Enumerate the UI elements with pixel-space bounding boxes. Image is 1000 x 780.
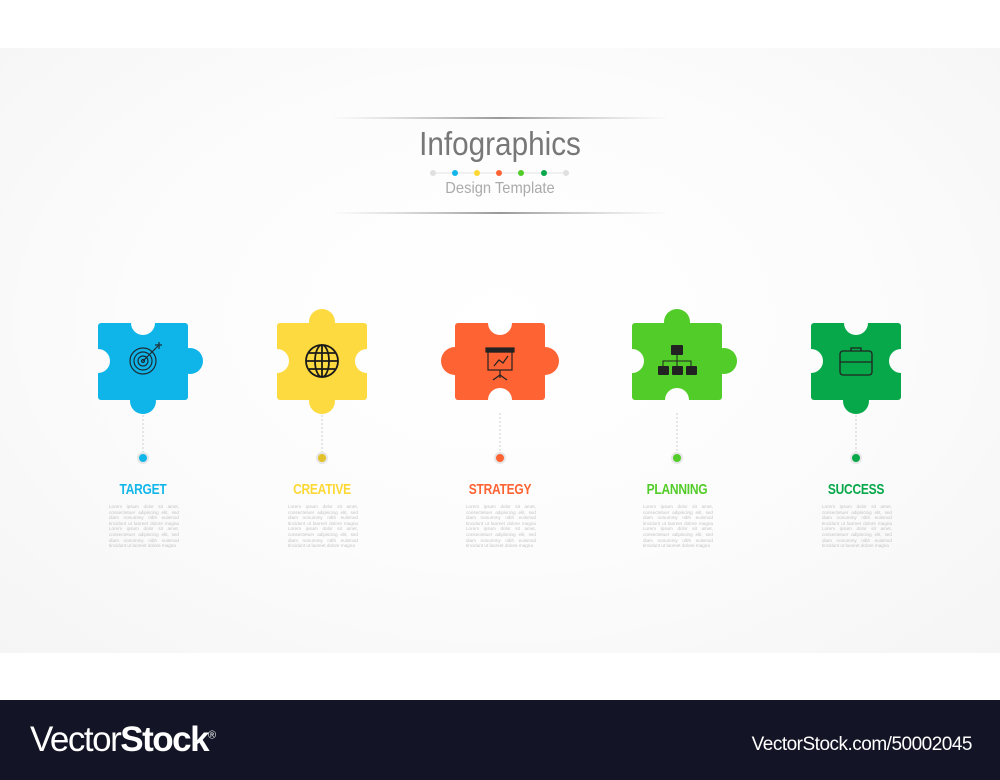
text block: success: Lorem ipsum dolor sit amet, consectetuer adipiscing elit, sed diam nonummy nibh euismod tincidunt ut laoreet dolore magna Lorem ipsum dolor sit amet, consectetuer adipiscing elit, sed diam nonummy nibh euismod tincidunt ut laoreet dolore magna (822, 504, 892, 548)
label: strategy: STRATEGY (469, 481, 531, 498)
label: creative: CREATIVE (293, 481, 351, 498)
footer url: VectorStock.com/50002045 (752, 734, 972, 755)
piece: creative (277, 309, 367, 414)
title header (350, 117, 650, 214)
piece: target (98, 323, 203, 414)
text block: creative: Lorem ipsum dolor sit amet, consectetuer adipiscing elit, sed diam nonummy nibh euismod tincidunt ut laoreet dolore magna Lorem ipsum dolor sit amet, consectetuer adipiscing elit, sed diam nonummy nibh euismod tincidunt ut laoreet dolore magna (288, 504, 358, 548)
dots (138, 453, 861, 463)
footer logo: VectorStock® (30, 720, 215, 759)
label: target: TARGET (120, 481, 166, 498)
text block: strategy: Lorem ipsum dolor sit amet, consectetuer adipiscing elit, sed diam nonummy nibh euismod tincidunt ut laoreet dolore magna Lorem ipsum dolor sit amet, consectetuer adipiscing elit, sed diam nonummy nibh euismod tincidunt ut laoreet dolore magna (466, 504, 536, 548)
label: planning: PLANNING (647, 481, 707, 498)
piece: strategy (441, 323, 559, 400)
text block: target: Lorem ipsum dolor sit amet, consectetuer adipiscing elit, sed diam nonummy nibh euismod tincidunt ut laoreet dolore magna Lorem ipsum dolor sit amet, consectetuer adipiscing elit, sed diam nonummy nibh euismod tincidunt ut laoreet dolore magna (109, 504, 179, 548)
puzzle pieces (98, 309, 901, 464)
footer (0, 700, 1000, 780)
text block: planning: Lorem ipsum dolor sit amet, consectetuer adipiscing elit, sed diam nonummy nibh euismod tincidunt ut laoreet dolore magna Lorem ipsum dolor sit amet, consectetuer adipiscing elit, sed diam nonummy nibh euismod tincidunt ut laoreet dolore magna (643, 504, 713, 548)
connectors (143, 413, 856, 452)
label: success: SUCCESS (828, 481, 884, 498)
piece: planning (632, 309, 737, 400)
title header: Infographics (419, 125, 581, 162)
title header: Design Template (445, 180, 555, 197)
piece: success (811, 323, 901, 414)
